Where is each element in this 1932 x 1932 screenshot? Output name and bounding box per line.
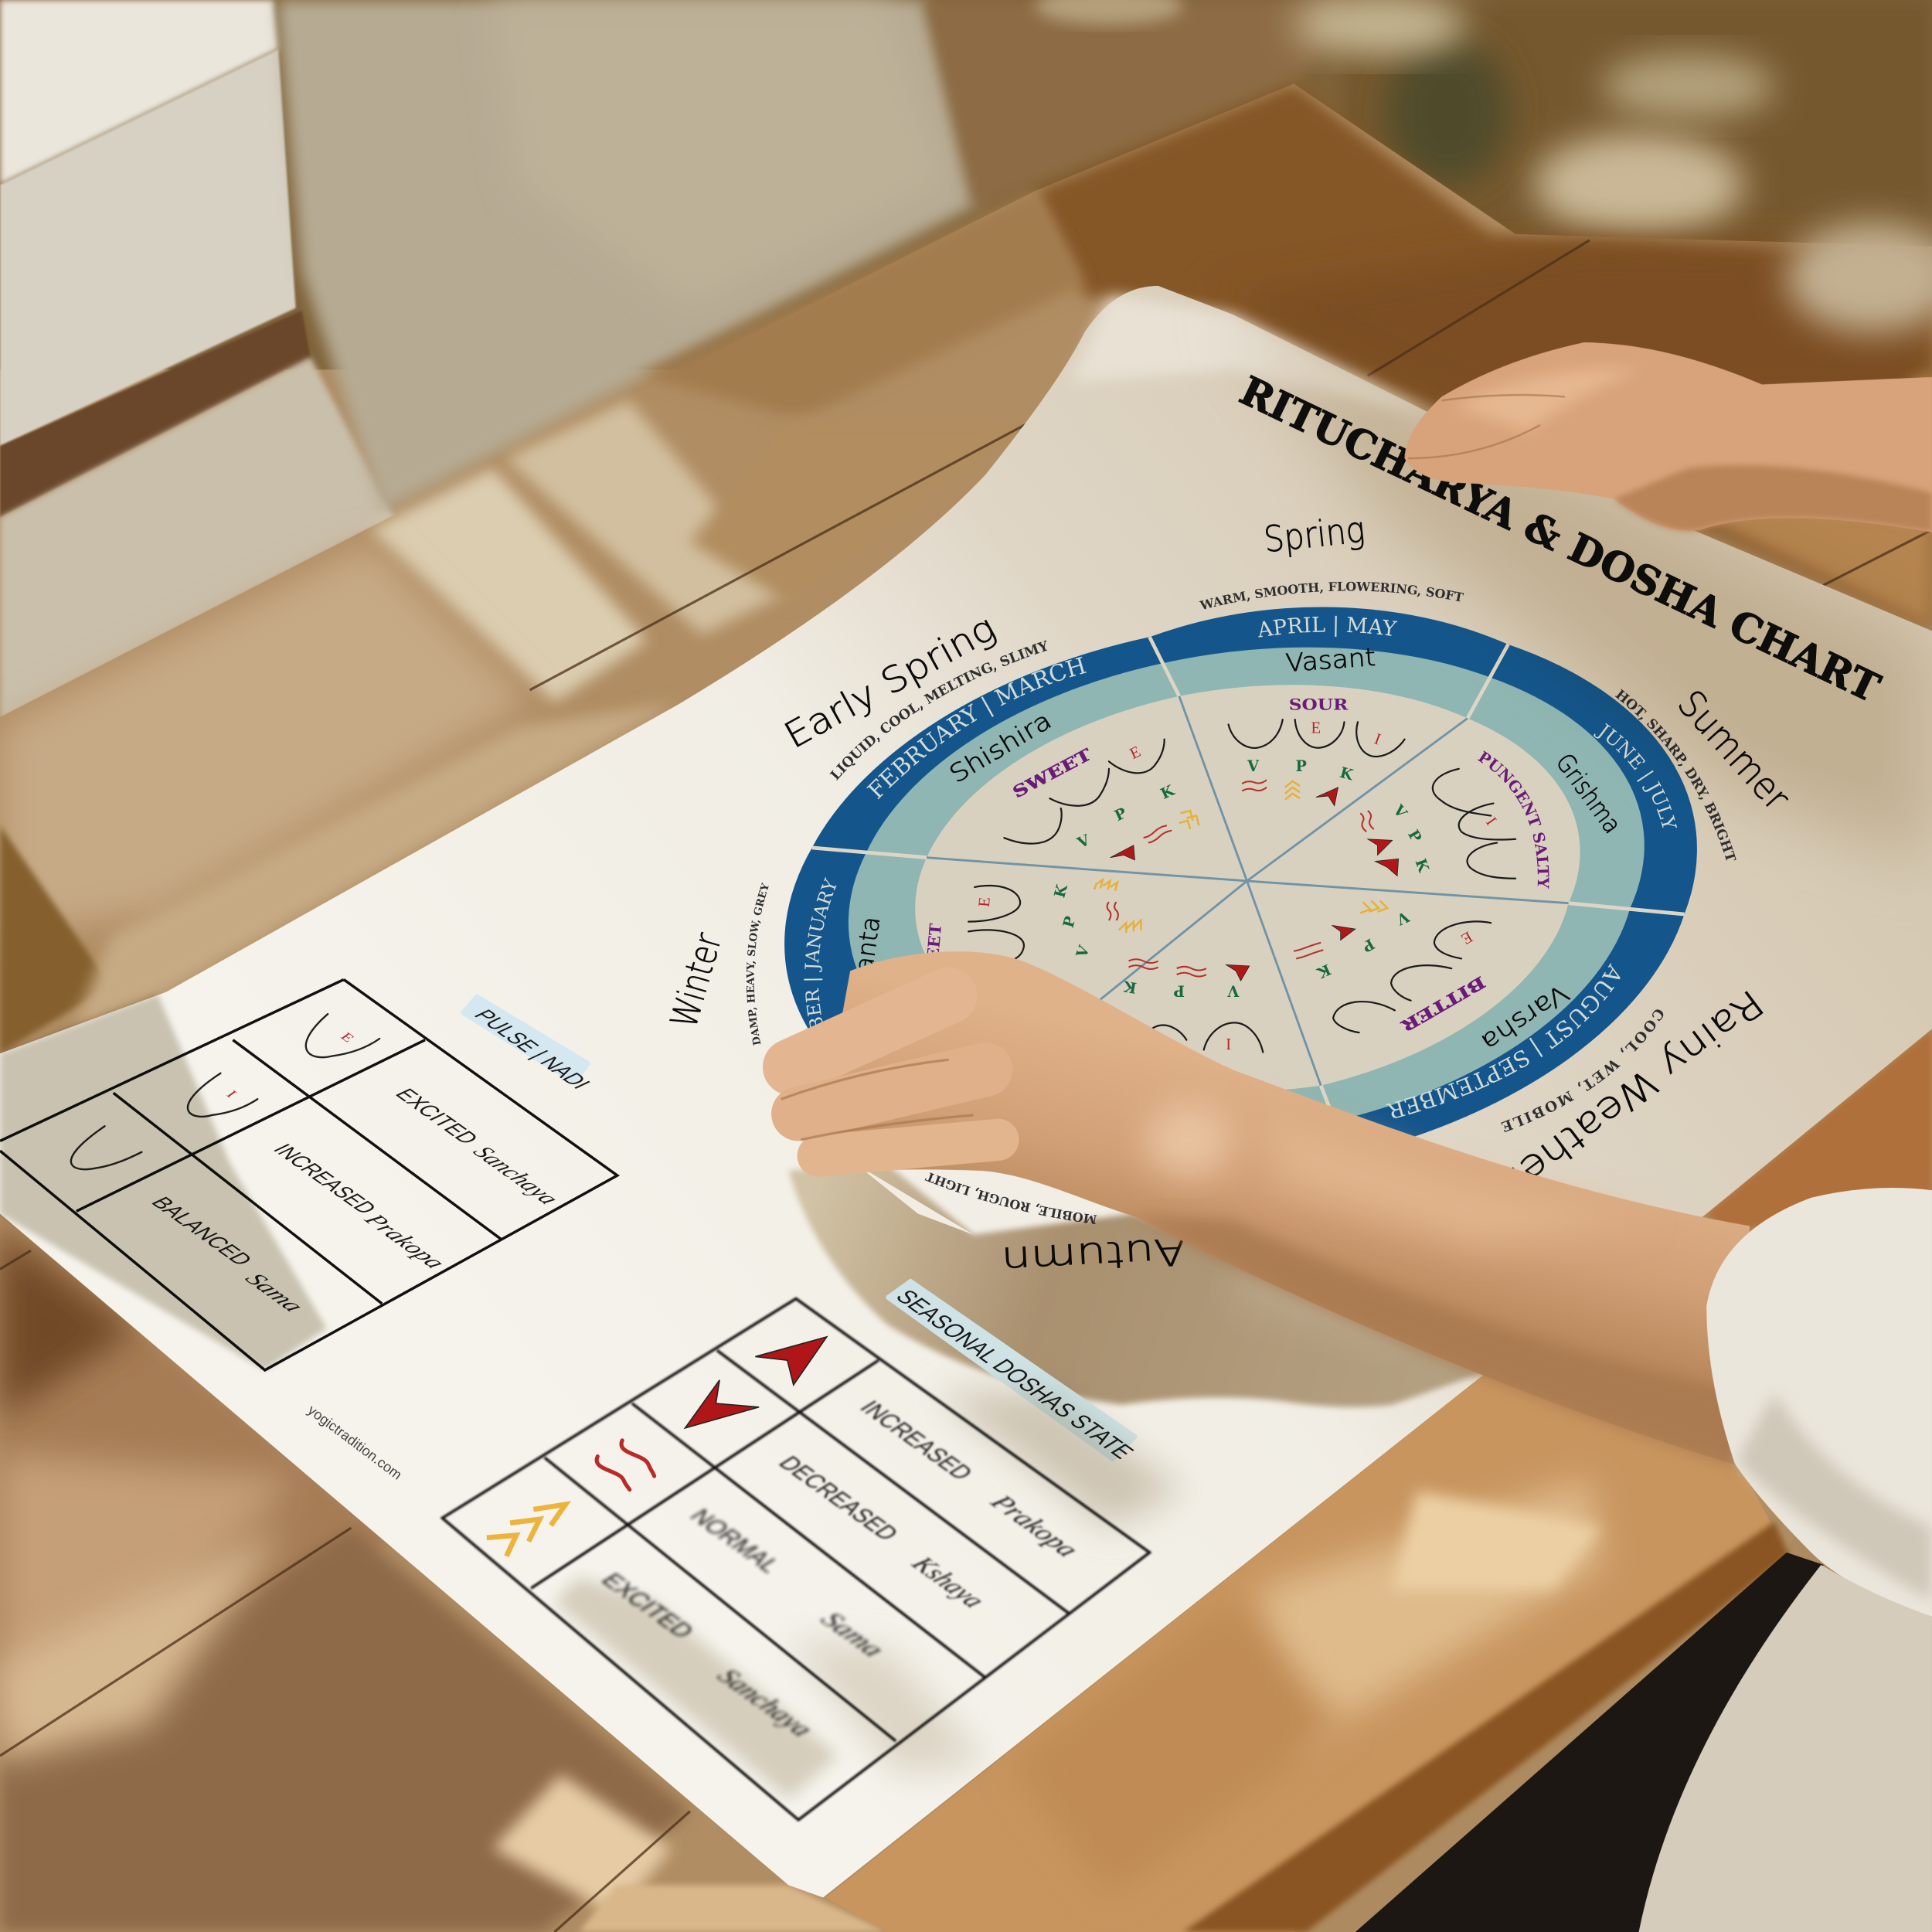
seasonal rows upper: DECREASED bbox=[773, 1452, 905, 1544]
sanskrit season names bbox=[841, 642, 1628, 1058]
wedge: pungent salty: V bbox=[1389, 801, 1411, 822]
wedge: bitter: BITTER bbox=[1397, 972, 1488, 1036]
pulse row texts: Prakopa bbox=[358, 1210, 452, 1271]
season qualities: WARM, SMOOTH, FLOWERING, SOFT bbox=[1199, 581, 1464, 609]
wedge: sweet bbox=[1004, 740, 1199, 860]
season qualities: DAMP, HEAVY, SLOW, GREY bbox=[747, 883, 769, 1046]
light and shadow falling on the paper bbox=[0, 308, 1932, 1799]
pulse row texts: Sama bbox=[240, 1270, 311, 1315]
wedge: bitter bbox=[1294, 900, 1491, 1036]
wedge: pungent salty: P bbox=[1404, 827, 1425, 845]
finger: index bbox=[791, 995, 949, 1067]
sanskrit season names: Vasant bbox=[1284, 642, 1376, 678]
season qualities: LIQUID, COOL, MELTING, SLIMY bbox=[830, 640, 1048, 781]
wedge: bitter: V bbox=[1393, 907, 1413, 929]
sanskrit season names: Grishma bbox=[1550, 748, 1628, 838]
panel: seasonal doshas state table bbox=[442, 1281, 1150, 1820]
outer season names bbox=[663, 509, 1798, 1281]
wedge: pungent salty: I bbox=[1482, 815, 1499, 828]
icon: increased arrow bbox=[755, 1337, 827, 1385]
wedge: bitter: E bbox=[1458, 928, 1475, 947]
month labels bbox=[804, 615, 1677, 1118]
seasonal label pill bbox=[889, 1281, 1134, 1459]
seasonal rows lower: Sanchaya bbox=[711, 1665, 820, 1740]
lower arm and hand bbox=[781, 951, 1750, 1466]
wedge: sweet (winter): E bbox=[976, 896, 994, 908]
wedge: sour: K bbox=[1338, 764, 1356, 784]
wedge: sweet (winter): V bbox=[1073, 942, 1094, 961]
wedge: sour bbox=[1229, 696, 1405, 806]
outer blue month ring bbox=[784, 607, 1697, 1178]
finger creases bbox=[781, 1060, 974, 1140]
seasonal rows upper bbox=[773, 1396, 1085, 1612]
curled shaded underside of the paper below the hand bbox=[788, 1165, 1497, 1407]
month labels: DECEMBER | JANUARY bbox=[804, 877, 836, 1028]
pulse symbols: E bbox=[337, 1030, 357, 1045]
arm underside shade bbox=[1134, 1216, 1743, 1466]
blurred flowers on the right bbox=[1787, 222, 1932, 332]
wedge: pungent salty: PUNGENT SALTY bbox=[1478, 750, 1549, 889]
wedge: astringent: I bbox=[1226, 1035, 1231, 1052]
pulse label pill bbox=[463, 997, 588, 1082]
season qualities: MOBILE, ROUGH, LIGHT bbox=[924, 1172, 1097, 1224]
website credit: yogictradition.com bbox=[305, 1402, 405, 1483]
outer season names: Autumn bbox=[1000, 1229, 1187, 1281]
light sliver next to the hand bbox=[856, 1165, 974, 1235]
wedge: sweet: V bbox=[1074, 831, 1094, 852]
wedge: sweet (winter): P bbox=[1060, 914, 1080, 930]
seasonal rows upper: Prakopa bbox=[984, 1491, 1085, 1561]
white shirt sleeve bbox=[1706, 1188, 1932, 1617]
wedge: astringent: P bbox=[1174, 982, 1185, 1000]
seasonal rows upper: INCREASED bbox=[854, 1396, 979, 1484]
arm highlight bbox=[1257, 1109, 1651, 1244]
outer season names: Spring bbox=[1262, 509, 1367, 560]
wedge: sweet: E bbox=[1128, 743, 1144, 763]
trousers at bottom right bbox=[1639, 1565, 1932, 1932]
seasonal rows lower bbox=[595, 1505, 891, 1740]
pulse label text: PULSE | NADI bbox=[468, 1007, 596, 1092]
month labels: JUNE | JULY bbox=[1594, 723, 1677, 828]
seasonal rows upper: Kshaya bbox=[905, 1553, 992, 1612]
background: room behind the table bbox=[0, 0, 1932, 721]
pulse row texts: BALANCED bbox=[145, 1194, 258, 1269]
wedge: astringent: K bbox=[1121, 977, 1138, 997]
pulse row texts: INCREASED bbox=[267, 1141, 382, 1217]
month labels: AUGUST | SEPTEMBER bbox=[1386, 963, 1621, 1118]
seasonal label text: SEASONAL DOSHAS STATE bbox=[890, 1286, 1140, 1463]
ring dividers bbox=[812, 637, 1685, 1156]
wedge: pungent salty: K bbox=[1411, 856, 1433, 876]
teal sanskrit season ring bbox=[849, 648, 1645, 1133]
season qualities bbox=[745, 580, 1738, 1227]
wedge: sour: V bbox=[1247, 757, 1260, 775]
icon: normal waves bbox=[597, 1440, 655, 1490]
sanskrit season names: Shishira bbox=[944, 706, 1056, 789]
wedge: sweet (winter) bbox=[921, 879, 1141, 990]
finger: middle bbox=[798, 1070, 986, 1114]
icon: decreased arrow bbox=[685, 1380, 759, 1428]
pulse symbols: I bbox=[223, 1088, 240, 1100]
wedge: astringent: V bbox=[1226, 982, 1240, 1000]
outer season names: Summer bbox=[1668, 682, 1798, 819]
month labels: FEBRUARY | MARCH bbox=[866, 657, 1087, 799]
wedge: sour: P bbox=[1295, 757, 1307, 775]
pulse symbols bbox=[71, 1014, 379, 1169]
wedge: sweet (winter): SWEET bbox=[921, 923, 945, 990]
wedge: sweet: SWEET bbox=[1009, 745, 1095, 802]
cream centre disc bbox=[915, 685, 1580, 1092]
wedge dividers bbox=[927, 696, 1569, 1086]
dark clothing area at bottom right bbox=[1355, 1553, 1824, 1932]
outer season names: Winter bbox=[663, 928, 730, 1032]
seasonal rows lower: Sama bbox=[815, 1608, 891, 1661]
finger: ring bbox=[818, 1140, 998, 1156]
sunlit patch on the paper near the arm bbox=[1232, 1183, 1528, 1343]
sanskrit season names: Varsha bbox=[1476, 978, 1574, 1058]
outer season names: Early Spring bbox=[777, 607, 1002, 757]
sanskrit season names: Hemanta bbox=[841, 915, 886, 1031]
seasonal rows lower: EXCITED bbox=[595, 1569, 700, 1642]
wedge: sour: E bbox=[1311, 720, 1321, 737]
season qualities: COOL, WET, MOBILE bbox=[1501, 1009, 1663, 1133]
icon: excited chevrons bbox=[487, 1505, 566, 1556]
wedge: astringent bbox=[1121, 959, 1263, 1053]
sleeve shading bbox=[1737, 1393, 1932, 1602]
forearm and back of hand bbox=[813, 951, 1750, 1466]
wedge: pungent salty bbox=[1360, 747, 1553, 889]
top hand holding the paper bbox=[1405, 342, 1932, 532]
panel: ritucharya wheel bbox=[784, 607, 1697, 1136]
season qualities: HOT, SHARP, DRY, BRIGHT bbox=[1615, 689, 1736, 861]
pulse row texts: Sanchaya bbox=[467, 1143, 566, 1207]
seasonal table grid bbox=[442, 1298, 1150, 1820]
wrist highlight bbox=[1146, 1103, 1232, 1177]
wedge: bitter: K bbox=[1314, 961, 1334, 982]
title: RITUCHARYA & DOSHA CHART bbox=[1233, 368, 1886, 712]
wedge: bitter: P bbox=[1359, 935, 1378, 956]
wedge: sweet (winter): K bbox=[1050, 882, 1071, 900]
seasonal rows lower: NORMAL bbox=[684, 1505, 787, 1577]
pulse table grid bbox=[0, 980, 617, 1370]
wedge: sour: I bbox=[1372, 730, 1383, 749]
wedge: sour: SOUR bbox=[1289, 696, 1348, 713]
wedge: sweet: P bbox=[1112, 804, 1129, 825]
month labels: APRIL | MAY bbox=[1258, 615, 1397, 638]
pulse row texts bbox=[145, 1086, 566, 1315]
panel: pulse nadi table bbox=[0, 980, 617, 1370]
outer season names: Rainy Weather bbox=[1497, 981, 1771, 1202]
pulse row texts: EXCITED bbox=[389, 1086, 484, 1148]
wedge: sweet: K bbox=[1158, 781, 1178, 803]
